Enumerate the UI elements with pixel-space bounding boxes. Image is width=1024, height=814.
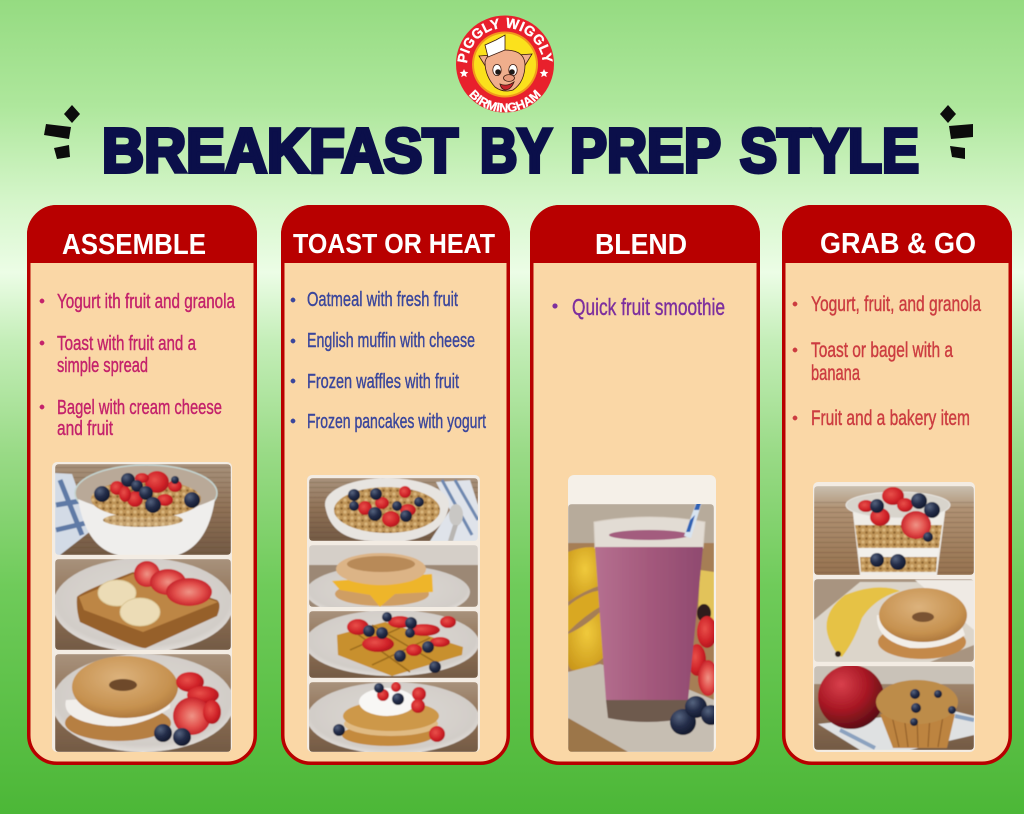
heading: grab and go: GRAB & GO <box>820 228 976 260</box>
list: toast or heat items: English muffin with cheese <box>307 330 475 352</box>
list: assemble items: simple spread <box>57 355 148 377</box>
photo: oatmeal with fresh fruit <box>309 478 478 541</box>
photo: yogurt parfait cup <box>814 486 974 575</box>
photo: frozen pancakes with yogurt <box>307 682 479 754</box>
title: PREP <box>570 117 720 186</box>
list: assemble items: Yogurt ith fruit and granola <box>57 291 236 313</box>
list: toast or heat items: Frozen pancakes with yogurt <box>307 411 486 433</box>
photo: apple and blueberry muffin <box>814 665 974 750</box>
list: toast or heat items <box>291 289 486 433</box>
list: grab and go items <box>793 293 981 430</box>
photo: bagel with cream cheese and fruit <box>52 654 234 752</box>
logo stars <box>460 69 548 77</box>
photo frame: assemble <box>52 462 232 752</box>
list: blend item: Quick fruit smoothie <box>572 294 725 320</box>
right burst accent <box>940 105 973 159</box>
logo: Piggly Wiggly Birmingham <box>456 16 554 112</box>
photo: toast with peanut butter, banana and strawberries <box>53 558 233 652</box>
logo text: bottom arc: BIRMINGHAM <box>468 89 542 112</box>
title: STYLE <box>740 117 919 186</box>
list: toast or heat items: Frozen waffles with fruit <box>307 371 459 393</box>
list: grab and go items: banana <box>811 362 860 385</box>
logo pig mascot <box>479 35 532 91</box>
list: assemble items: and fruit <box>57 418 113 440</box>
list: grab and go items: Fruit and a bakery item <box>811 407 970 430</box>
logo text: top arc: PIGGLY WIGGLY <box>457 18 553 63</box>
heading: assemble: ASSEMBLE <box>62 229 206 261</box>
photo: frozen waffles with fruit <box>305 610 479 678</box>
photo: English muffin with cheese <box>309 545 478 607</box>
photo: fruit smoothie <box>568 504 714 752</box>
panel: toast or heat <box>281 205 510 763</box>
heading: toast or heat: TOAST OR HEAT <box>293 228 495 259</box>
list: grab and go items: Toast or bagel with a <box>811 339 953 362</box>
title: BY <box>480 117 552 186</box>
panel: blend <box>530 205 760 763</box>
photo frame: grab and go <box>813 482 975 752</box>
panel: grab and go <box>782 205 1012 763</box>
panel: assemble <box>27 205 257 763</box>
list: assemble items: Bagel with cream cheese <box>57 397 222 419</box>
list: assemble items <box>40 291 236 440</box>
list: blend item <box>553 294 725 320</box>
title: BREAKFAST <box>102 117 458 186</box>
photo: yogurt bowl with granola and fruit <box>55 464 231 555</box>
photo: banana and bagel <box>814 579 974 662</box>
photo frame: blend <box>568 475 716 752</box>
photo frame: toast or heat <box>307 475 480 752</box>
list: toast or heat items: Oatmeal with fresh fruit <box>307 289 458 311</box>
list: assemble items: Toast with fruit and a <box>57 333 197 355</box>
left burst accent <box>44 105 80 159</box>
heading: blend: BLEND <box>595 229 687 261</box>
